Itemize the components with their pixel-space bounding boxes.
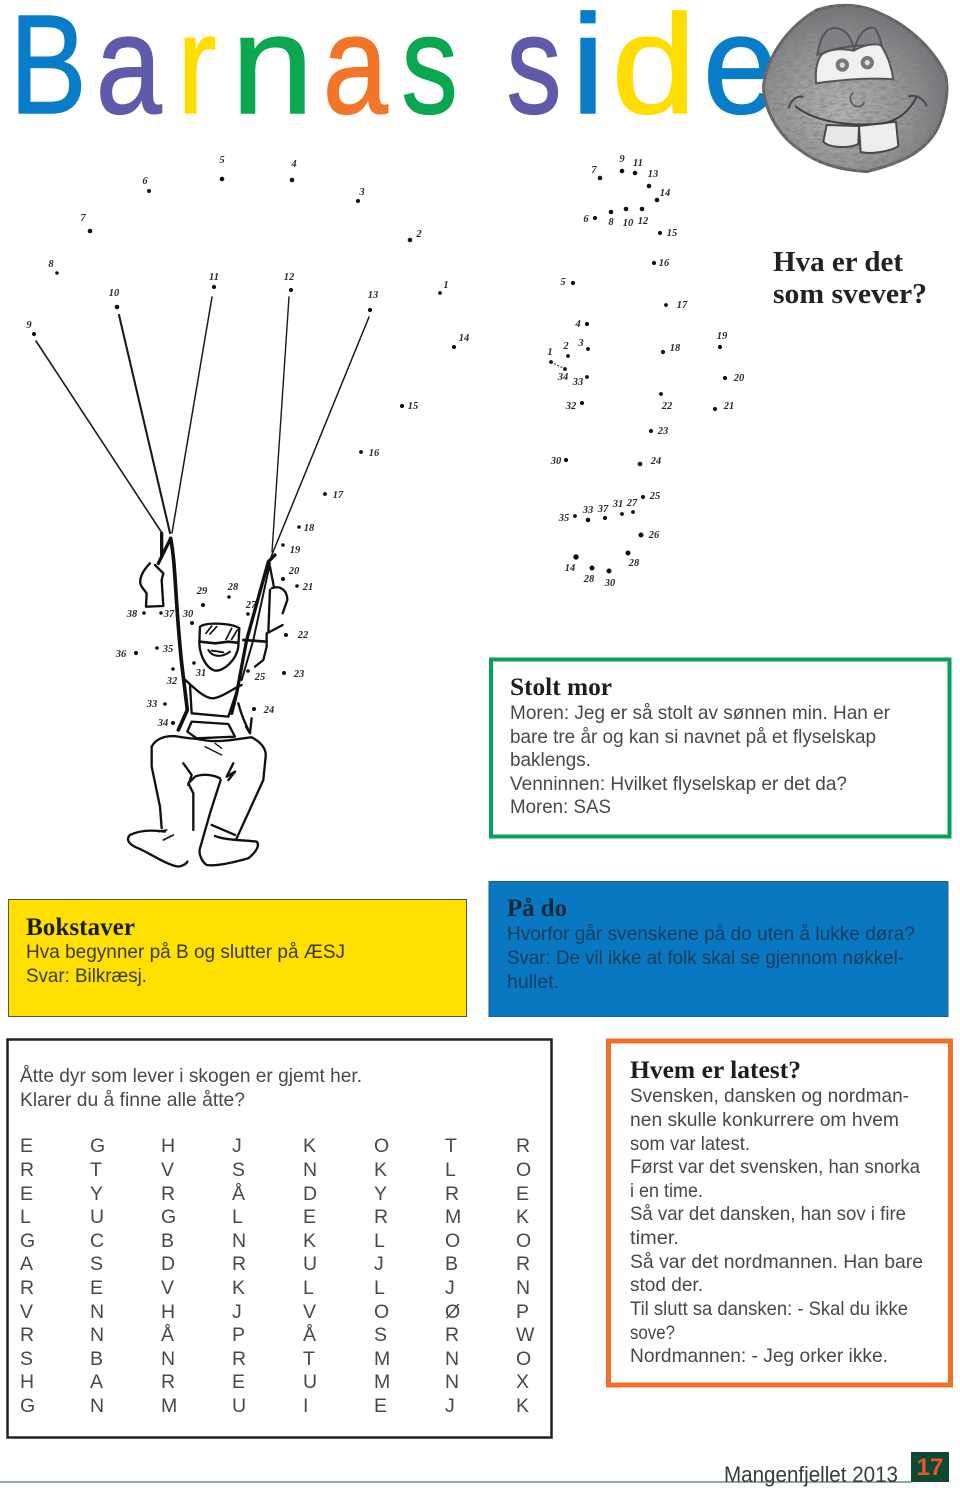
- parachute dot numbers: 14: [459, 333, 469, 344]
- letter grid: B: [90, 1348, 103, 1370]
- heading: Hvem er latest: Hvem er latest?: [630, 1057, 801, 1084]
- shape dot numbers: 19: [717, 331, 728, 342]
- letter grid: E: [374, 1395, 387, 1417]
- footer: [0, 1452, 949, 1487]
- joke text: Hva begynner på B og slutter på ÆSJ: [26, 941, 345, 963]
- parachute dot numbers: 16: [369, 448, 380, 459]
- letter grid: L: [232, 1206, 243, 1228]
- shape dot numbers: 8: [608, 217, 614, 228]
- letter grid: M: [161, 1395, 177, 1417]
- letter grid: U: [303, 1253, 317, 1275]
- shape dot numbers: 32: [565, 401, 577, 412]
- joke text: Nordmannen: - Jeg orker ikke.: [630, 1345, 888, 1367]
- letter grid: K: [374, 1159, 387, 1181]
- letter grid: Y: [374, 1183, 387, 1205]
- letter grid: D: [161, 1253, 175, 1275]
- joke text: som var latest.: [630, 1133, 750, 1155]
- letter grid: V: [161, 1277, 174, 1299]
- joke text: Så var det nordmannen. Han bare: [630, 1251, 923, 1273]
- shape dot numbers: 35: [558, 513, 569, 524]
- parachute dot numbers: 15: [408, 401, 418, 412]
- letter grid: V: [303, 1301, 316, 1323]
- letter grid: O: [516, 1230, 531, 1252]
- shape dot numbers: 3: [577, 338, 584, 349]
- letter grid: V: [20, 1301, 33, 1323]
- title: [10, 0, 778, 144]
- parachute dot numbers: 30: [182, 609, 194, 620]
- letter grid: S: [20, 1348, 33, 1370]
- letter grid: U: [232, 1395, 246, 1417]
- letter grid: B: [445, 1253, 458, 1275]
- shape dot numbers: 9: [619, 154, 625, 165]
- heading: Bokstaver: Bokstaver: [26, 914, 135, 941]
- letter grid: Å: [232, 1182, 245, 1205]
- shape dot numbers: 14: [565, 563, 575, 574]
- parachute dots: [32, 177, 456, 725]
- panel: Bokstaver: [8, 900, 466, 1016]
- letter grid: A: [90, 1371, 103, 1393]
- letter grid: K: [516, 1395, 529, 1417]
- letter grid: Y: [90, 1183, 103, 1205]
- letter grid: S: [374, 1324, 387, 1346]
- letter grid: N: [516, 1277, 530, 1299]
- panel: På do: [489, 882, 948, 1016]
- letter grid: H: [161, 1135, 175, 1157]
- letter grid: E: [90, 1277, 103, 1299]
- shape dot numbers: [547, 154, 745, 589]
- shape dot numbers: 18: [670, 343, 681, 354]
- joke text: timer.: [630, 1227, 679, 1249]
- letter grid: R: [232, 1348, 246, 1370]
- shape dot numbers: 28: [583, 574, 595, 585]
- parachute dot numbers: 23: [293, 669, 304, 680]
- dot-to-dot: floating shape: [547, 154, 745, 589]
- letter grid: K: [232, 1277, 245, 1299]
- parachute dot numbers: 35: [162, 644, 173, 655]
- word search intro: Klarer du å finne alle åtte?: [20, 1089, 245, 1111]
- shape dot numbers: 4: [574, 319, 581, 330]
- joke text: Moren: Jeg er så stolt av sønnen min. Han er: [510, 702, 890, 724]
- letter grid: E: [303, 1206, 316, 1228]
- letter grid: N: [445, 1348, 459, 1370]
- letter grid: R: [161, 1371, 175, 1393]
- letter grid: H: [20, 1371, 34, 1393]
- shape dot numbers: 26: [648, 530, 660, 541]
- joke text: stod der.: [630, 1274, 703, 1296]
- parachute dot numbers: 31: [195, 668, 206, 679]
- letter grid: R: [445, 1324, 459, 1346]
- parachute dot numbers: 38: [126, 609, 138, 620]
- letter grid: R: [20, 1159, 34, 1181]
- shape dot numbers: 7: [591, 165, 597, 176]
- letter grid: X: [516, 1371, 529, 1393]
- letter grid: A: [20, 1253, 33, 1275]
- letter grid: O: [516, 1348, 531, 1370]
- panel: Stolt mor: [491, 660, 950, 836]
- letter grid: E: [20, 1183, 33, 1205]
- parachute dot numbers: 13: [368, 290, 378, 301]
- parachute dot numbers: 33: [146, 699, 157, 710]
- joke text: hullet.: [507, 971, 559, 993]
- letter grid: G: [90, 1135, 105, 1157]
- parachute dot numbers: 3: [358, 187, 365, 198]
- letter grid: N: [445, 1371, 459, 1393]
- parachute dot numbers: 24: [263, 705, 274, 716]
- parachute dot numbers: [26, 155, 469, 729]
- letter grid: Å: [303, 1323, 316, 1346]
- shape dot numbers: 13: [648, 169, 658, 180]
- shape dot numbers: 17: [677, 300, 688, 311]
- letter grid: G: [161, 1206, 176, 1228]
- shape dot numbers: 28: [628, 558, 640, 569]
- shape dot numbers: 23: [657, 426, 668, 437]
- letter grid: J: [445, 1277, 455, 1299]
- shape dot numbers: 5: [560, 277, 566, 288]
- joke text: Så var det dansken, han sov i fire: [630, 1203, 906, 1225]
- letter grid: N: [232, 1230, 246, 1252]
- shape dot numbers: 11: [633, 158, 643, 169]
- parachute dot numbers: 6: [142, 176, 148, 187]
- joke text: Først var det svensken, han snorka: [630, 1156, 920, 1178]
- parachute dot numbers: 28: [227, 582, 239, 593]
- joke text: bare tre år og kan si navnet på et flyselskap: [510, 726, 876, 748]
- figure: person in harness: [128, 533, 287, 867]
- parachute dot numbers: 32: [166, 676, 178, 687]
- question: what floats: Hva er det: [773, 246, 903, 278]
- letter grid: O: [445, 1230, 460, 1252]
- letter grid: B: [161, 1230, 174, 1252]
- letter grid: O: [374, 1135, 389, 1157]
- letter grid: T: [303, 1348, 315, 1370]
- joke text: baklengs.: [510, 749, 591, 771]
- shape dot numbers: 21: [723, 401, 734, 412]
- parachute dot numbers: 19: [290, 545, 301, 556]
- page number: [911, 1452, 949, 1482]
- parachute dot numbers: 9: [26, 320, 32, 331]
- joke text: sove?: [630, 1322, 675, 1344]
- shape dot numbers: 34: [557, 372, 568, 383]
- letter grid: V: [161, 1159, 174, 1181]
- parachute dot numbers: 27: [245, 600, 257, 611]
- letter grid: I: [303, 1395, 308, 1417]
- panel: Hvem er latest: [608, 1041, 950, 1385]
- letter grid: P: [232, 1324, 245, 1346]
- shape dot numbers: 33: [572, 377, 583, 388]
- heading: Stolt mor: Stolt mor: [510, 674, 612, 701]
- letter grid: P: [516, 1301, 529, 1323]
- question: what floats: som svever?: [773, 278, 927, 310]
- letter grid: U: [303, 1371, 317, 1393]
- letter grid: M: [445, 1206, 461, 1228]
- parachute dot numbers: 20: [288, 566, 300, 577]
- letter grid: N: [303, 1159, 317, 1181]
- letter grid: J: [232, 1301, 242, 1323]
- parachute dot numbers: 37: [163, 609, 175, 620]
- letter grid: R: [161, 1183, 175, 1205]
- letter grid: R: [445, 1183, 459, 1205]
- letter grid: M: [374, 1371, 390, 1393]
- letter grid: T: [445, 1135, 457, 1157]
- parachute dot numbers: 12: [284, 272, 295, 283]
- parachute dot numbers: 11: [209, 272, 219, 283]
- letter grid: G: [20, 1230, 35, 1252]
- shape dots: [549, 169, 727, 573]
- joke text: Moren: SAS: [510, 796, 611, 818]
- letter grid: L: [445, 1159, 456, 1181]
- letter grid: L: [374, 1230, 385, 1252]
- letter grid: E: [516, 1183, 529, 1205]
- shape dot numbers: 31: [612, 499, 623, 510]
- shape dot numbers: 20: [733, 373, 745, 384]
- letter grid: R: [232, 1253, 246, 1275]
- parachute dot numbers: 5: [219, 155, 225, 166]
- shape dot numbers: 22: [661, 401, 673, 412]
- shape dot numbers: 6: [583, 214, 589, 225]
- parachute dot numbers: 34: [157, 718, 168, 729]
- shape dot numbers: 10: [623, 218, 634, 229]
- letter grid: R: [20, 1277, 34, 1299]
- letter grid: J: [445, 1395, 455, 1417]
- letter grid: E: [20, 1135, 33, 1157]
- joke text: Hvorfor går svenskene på do uten å lukke døra?: [507, 923, 915, 945]
- parachute dot numbers: 10: [109, 288, 120, 299]
- letter grid: K: [303, 1135, 316, 1157]
- letter grid: W: [516, 1324, 535, 1346]
- joke text: Venninnen: Hvilket flyselskap er det da?: [510, 773, 847, 795]
- shape dot numbers: 37: [597, 504, 609, 515]
- parachute dot numbers: 7: [80, 213, 86, 224]
- letter grid: Å: [161, 1323, 174, 1346]
- word search intro: Åtte dyr som lever i skogen er gjemt her.: [20, 1064, 362, 1087]
- panel: word search: [8, 1040, 552, 1438]
- letter grid: R: [516, 1253, 530, 1275]
- letter grid: L: [303, 1277, 314, 1299]
- joke text: [630, 1085, 923, 1367]
- shape dot numbers: 2: [562, 341, 569, 352]
- letter grid: J: [374, 1253, 384, 1275]
- letter grid: N: [90, 1301, 104, 1323]
- shape dot numbers: 30: [550, 456, 562, 467]
- joke text: Svensken, dansken og nordman-: [630, 1085, 909, 1107]
- shape dot numbers: 15: [667, 228, 677, 239]
- letter grid: O: [516, 1159, 531, 1181]
- letter grid: O: [374, 1301, 389, 1323]
- parachute dot numbers: 8: [48, 259, 54, 270]
- page number: 17: [917, 1454, 943, 1481]
- icon: grey smiling face: [763, 5, 947, 172]
- dot-to-dot: parachutist: [26, 155, 469, 867]
- joke text: [510, 702, 890, 818]
- letter grid: D: [303, 1183, 317, 1205]
- shape dot numbers: 25: [649, 491, 660, 502]
- parachute dot numbers: 1: [443, 280, 449, 291]
- shape dot numbers: 16: [659, 258, 670, 269]
- letter grid: Ø: [445, 1301, 460, 1323]
- letter grid: G: [20, 1395, 35, 1417]
- letter grid: C: [90, 1230, 104, 1252]
- parachute dot numbers: 21: [302, 582, 313, 593]
- parachute dot numbers: 25: [254, 672, 265, 683]
- letter grid: J: [232, 1135, 242, 1157]
- letter grid: E: [232, 1371, 245, 1393]
- shape dot numbers: 33: [582, 505, 593, 516]
- joke text: nen skulle konkurrere om hvem: [630, 1109, 899, 1131]
- letter grid: L: [374, 1277, 385, 1299]
- letter grid: T: [90, 1159, 102, 1181]
- start of drawn line: [551, 362, 565, 369]
- joke text: Svar: De vil ikke at folk skal se gjennom nøkkel-: [507, 947, 904, 969]
- joke text: [507, 923, 915, 993]
- joke text: [26, 941, 345, 987]
- joke text: Svar: Bilkræsj.: [26, 965, 147, 987]
- parachute dot numbers: 29: [196, 586, 208, 597]
- joke text: Til slutt sa dansken: - Skal du ikke: [630, 1298, 908, 1320]
- parachute dot numbers: 17: [333, 490, 344, 501]
- letter grid: R: [374, 1206, 388, 1228]
- letter grid: R: [516, 1135, 530, 1157]
- parachute dot numbers: 22: [297, 630, 309, 641]
- parachute dot numbers: 4: [290, 159, 297, 170]
- shape dot numbers: 1: [547, 347, 553, 358]
- shape dot numbers: 12: [638, 216, 649, 227]
- letter grid: S: [232, 1159, 245, 1181]
- shape dot numbers: 24: [650, 456, 661, 467]
- letter grid: L: [20, 1206, 31, 1228]
- shape dot numbers: 27: [626, 498, 638, 509]
- heading: På do: På do: [507, 895, 567, 922]
- letter grid: R: [20, 1324, 34, 1346]
- parachute strings: [36, 297, 369, 557]
- letter grid: N: [90, 1395, 104, 1417]
- parachute dot numbers: 18: [304, 523, 315, 534]
- shape dot numbers: 30: [604, 578, 616, 589]
- word search intro: [20, 1064, 362, 1111]
- question: what floats: [773, 246, 927, 310]
- letter grid: [20, 1135, 535, 1417]
- joke text: i en time.: [630, 1180, 703, 1202]
- letter grid: N: [90, 1324, 104, 1346]
- letter grid: N: [161, 1348, 175, 1370]
- letter grid: K: [516, 1206, 529, 1228]
- letter grid: K: [303, 1230, 316, 1252]
- letter grid: U: [90, 1206, 104, 1228]
- letter grid: M: [374, 1348, 390, 1370]
- letter grid: S: [90, 1253, 103, 1275]
- magazine name: Mangenfjellet 2013: [724, 1462, 898, 1487]
- shape dot numbers: 14: [660, 188, 670, 199]
- parachute dot numbers: 2: [415, 229, 422, 240]
- parachute dot numbers: 36: [115, 649, 127, 660]
- letter grid: H: [161, 1301, 175, 1323]
